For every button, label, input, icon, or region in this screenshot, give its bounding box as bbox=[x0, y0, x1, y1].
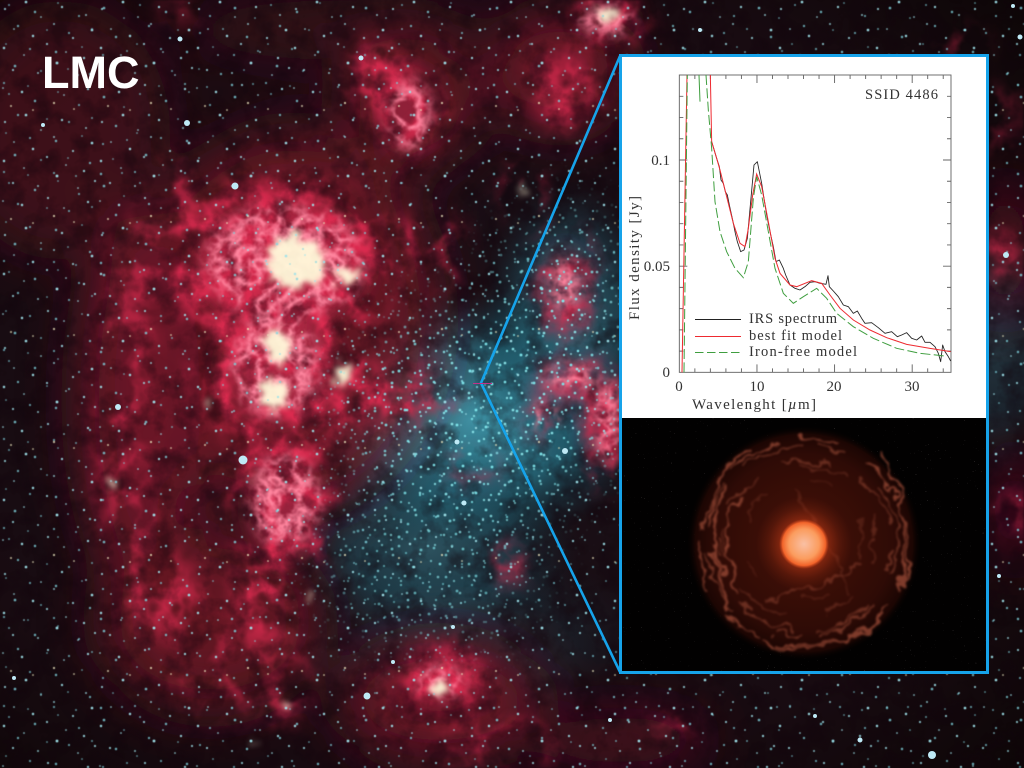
dust filaments bbox=[700, 439, 908, 650]
dataset label: SSID 4486 bbox=[865, 87, 938, 103]
legend: IRS spectrum bbox=[749, 311, 838, 327]
axis numbers: 0 bbox=[675, 379, 683, 395]
y axis label: Flux density [Jy] bbox=[627, 196, 643, 320]
axis numbers: 10 bbox=[750, 379, 764, 395]
central star bbox=[779, 519, 829, 569]
title: LMC: LMC bbox=[42, 47, 139, 98]
dense blue star cloud bbox=[286, 172, 619, 676]
pink highlights bbox=[198, 0, 641, 705]
axis numbers: 0.1 bbox=[651, 153, 670, 169]
axis numbers bbox=[644, 153, 920, 395]
axis numbers: 0.05 bbox=[644, 259, 670, 275]
star illustration panel bbox=[620, 418, 989, 674]
axis numbers: 20 bbox=[826, 379, 842, 395]
plot frame and ticks bbox=[679, 75, 951, 372]
dust shell bbox=[686, 425, 922, 661]
curve: iron-free model bbox=[684, 75, 945, 372]
crimson nebula fill bbox=[195, 4, 632, 698]
axis numbers: 0 bbox=[662, 365, 670, 381]
spectrum chart panel bbox=[620, 55, 989, 419]
legend: Iron-free model bbox=[749, 344, 857, 360]
inset panel bbox=[620, 55, 989, 674]
central star glow bbox=[761, 501, 847, 586]
inset border bbox=[620, 56, 988, 672]
legend: best fit model bbox=[749, 328, 842, 344]
curve: IRS spectrum bbox=[712, 142, 951, 362]
cyan stellar bar bbox=[280, 180, 1024, 730]
source marker bbox=[473, 382, 492, 384]
legend bbox=[695, 311, 857, 360]
x axis label: Wavelenght [µm] bbox=[692, 397, 816, 413]
white-hot star-forming regions bbox=[107, 8, 618, 746]
callout lines from source to inset bbox=[481, 56, 620, 672]
curve: best fit model bbox=[682, 75, 951, 372]
axis numbers: 30 bbox=[904, 379, 920, 395]
